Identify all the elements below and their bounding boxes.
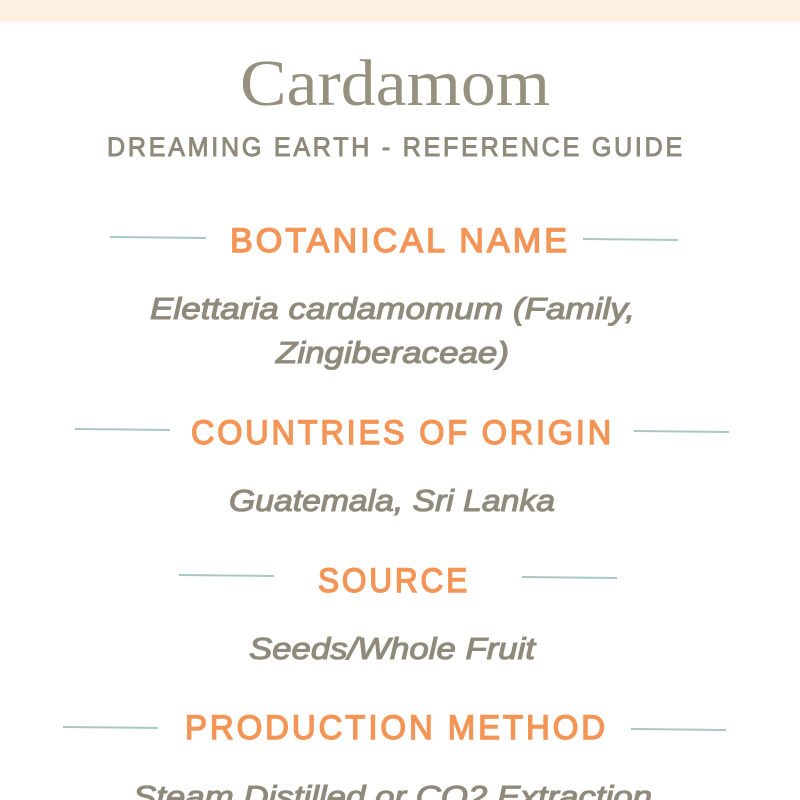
countries of origin value: Guatemala, Sri Lanka [229, 483, 555, 518]
section: source [179, 562, 617, 666]
section: botanical name: BOTANICAL NAME [230, 222, 570, 260]
section: production method: PRODUCTION METHOD [185, 709, 608, 747]
subtitle: DREAMING EARTH - REFERENCE GUIDE [107, 132, 685, 162]
botanical name value [150, 291, 635, 370]
botanical name value: Elettaria cardamomum (Family, [150, 291, 635, 326]
title: Cardamom [240, 47, 550, 120]
top banner [0, 0, 800, 22]
section: production method [63, 709, 726, 800]
section: countries of origin: COUNTRIES OF ORIGIN [191, 414, 614, 452]
section: source: SOURCE [318, 562, 470, 600]
source value: Seeds/Whole Fruit [249, 631, 537, 666]
botanical name value: Zingiberaceae) [275, 335, 509, 370]
section: countries of origin [75, 414, 729, 518]
section: botanical name [110, 222, 678, 370]
